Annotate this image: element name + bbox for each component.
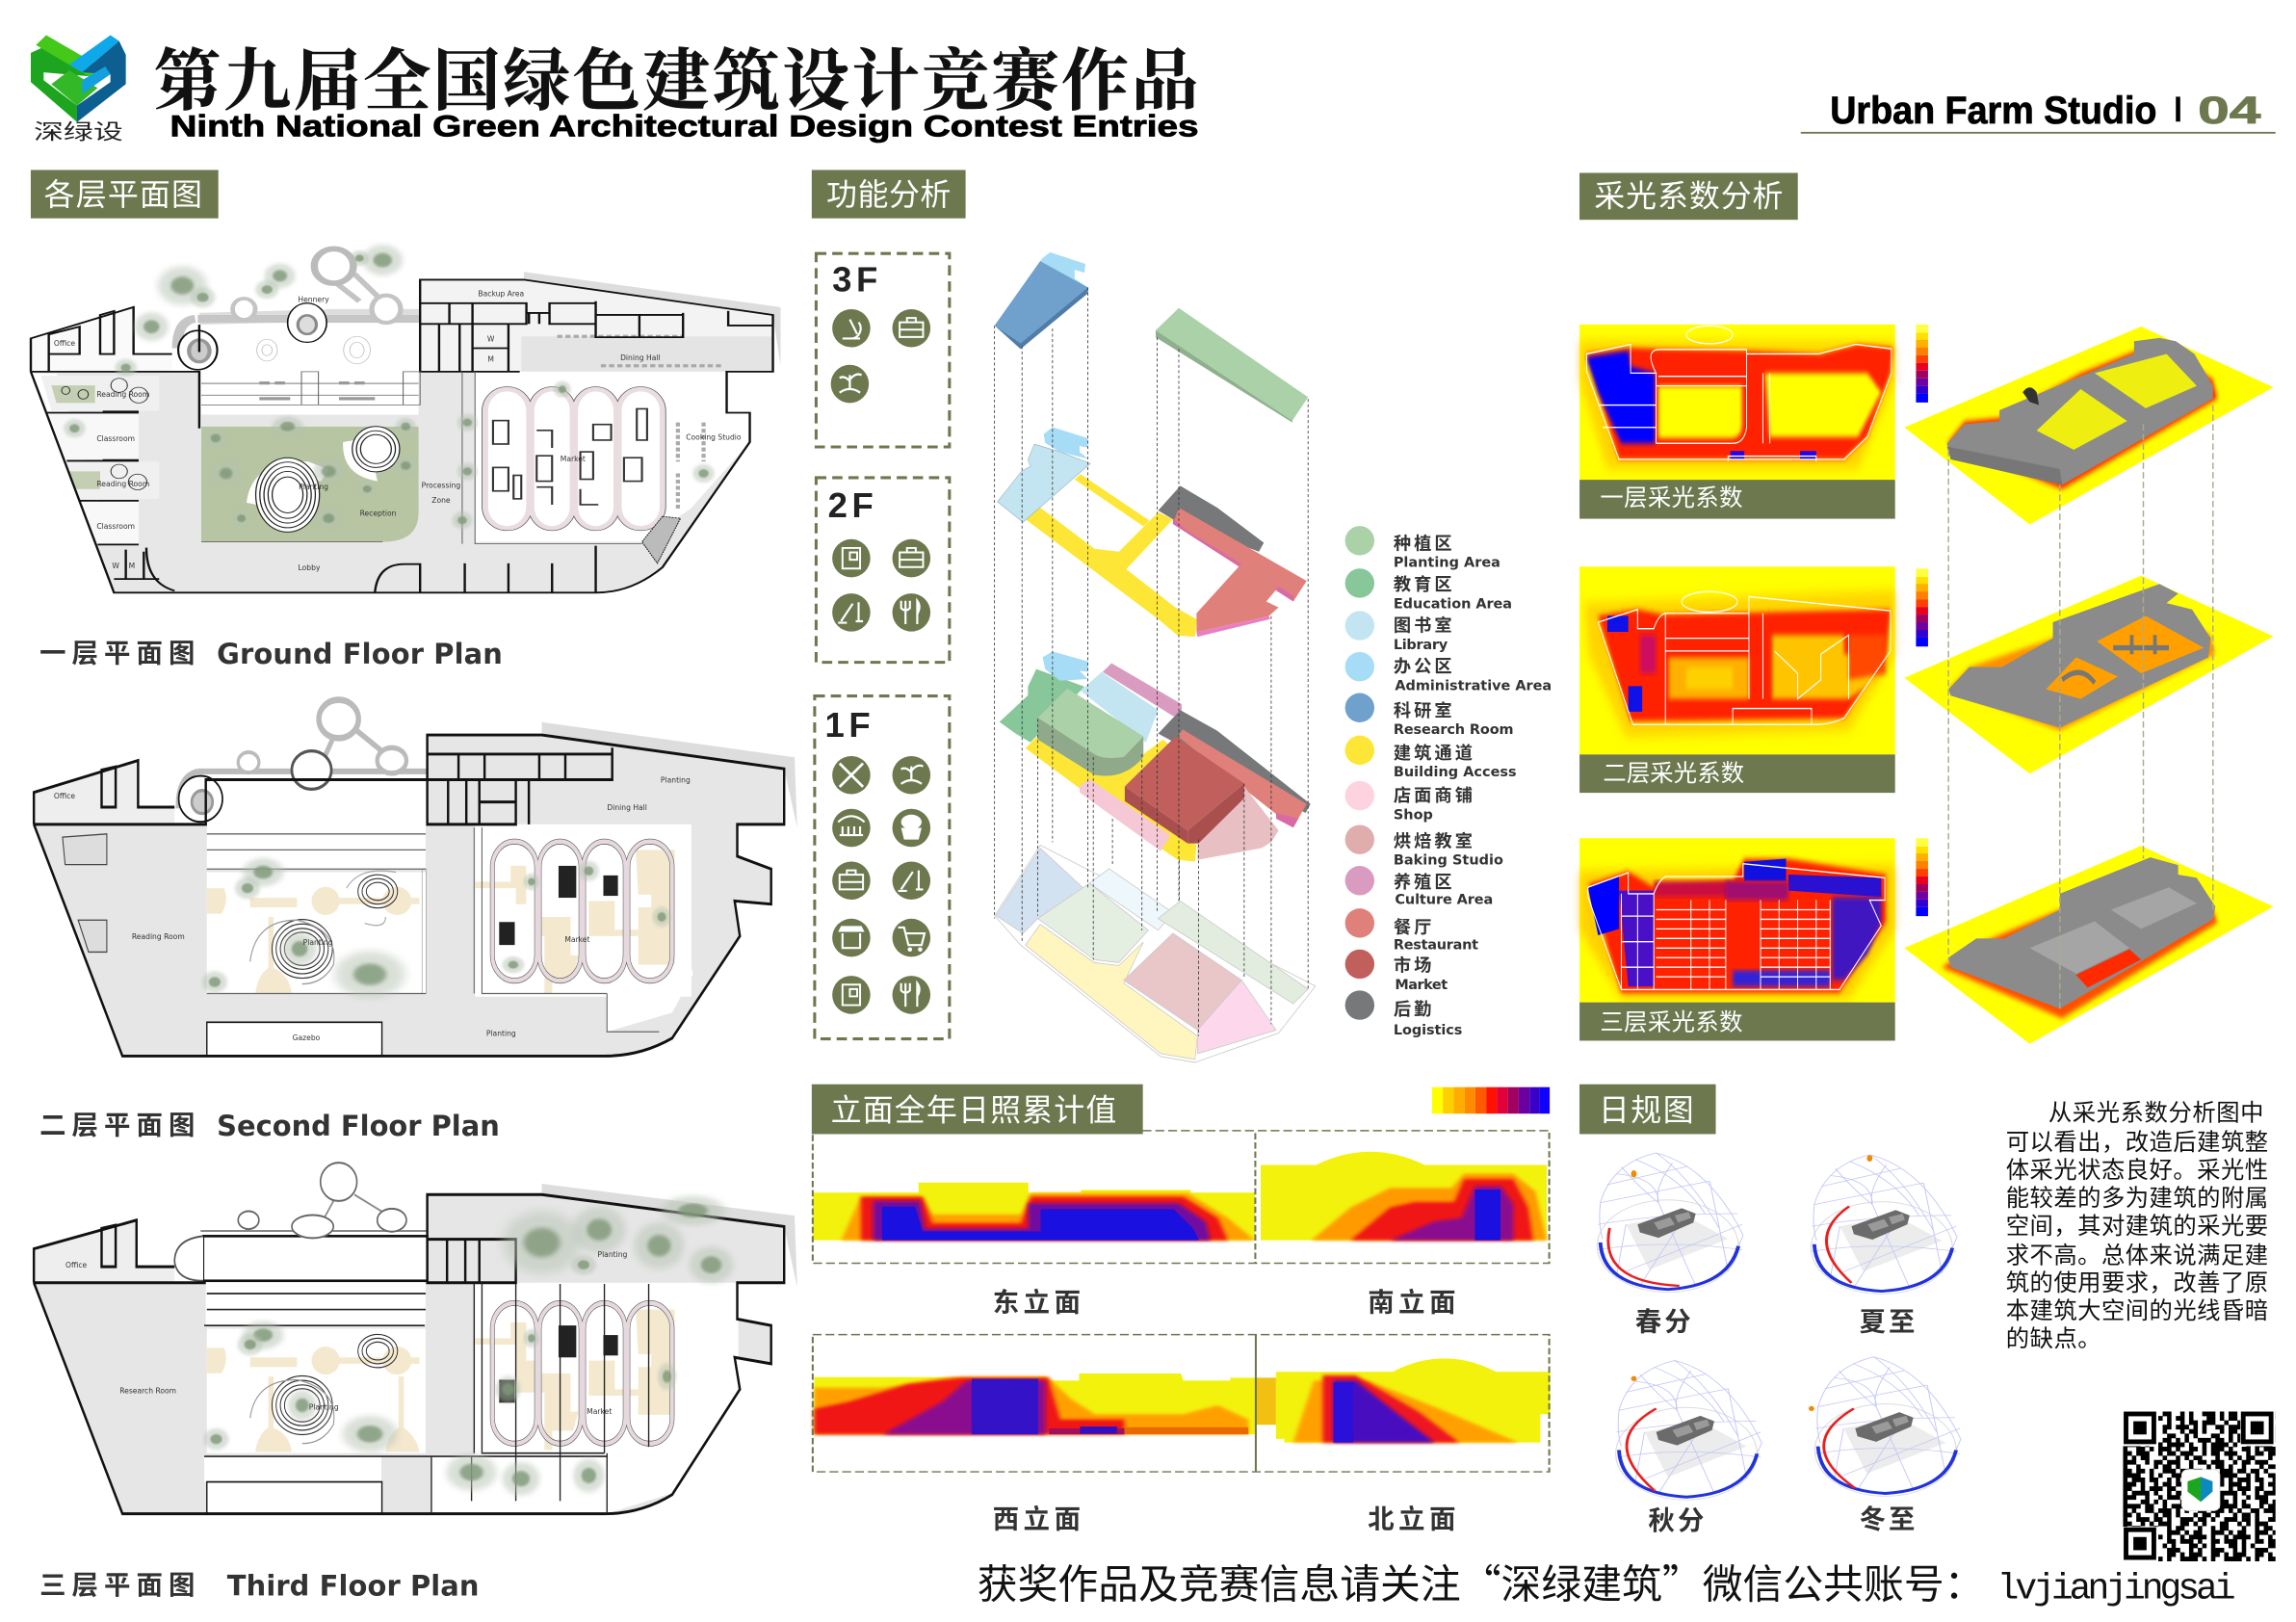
- legend: function colours: 图书室: [1394, 613, 1455, 638]
- icon: tools: [832, 756, 871, 795]
- second floor plan: Gazebo: [293, 1033, 321, 1042]
- autumn equinox dome: [1616, 1361, 1761, 1500]
- ground floor plan: Hennery: [298, 295, 329, 303]
- third floor plan: Research Room: [119, 1387, 176, 1396]
- spring equinox dome: [1597, 1153, 1743, 1293]
- ground floor plan: Office: [54, 339, 75, 348]
- third floor plan: Planting: [597, 1250, 628, 1259]
- text block: analysis: 本建筑大空间的光线昏暗: [2006, 1293, 2268, 1326]
- icon: office case: [832, 861, 871, 900]
- text block: analysis: [2006, 1095, 2268, 1354]
- legend: function colours: 养殖区: [1394, 869, 1455, 894]
- icon: planting: [831, 365, 869, 403]
- ground floor plan: Classroom: [96, 522, 135, 531]
- facade labels: [993, 1281, 1460, 1536]
- daylight captions: 二层采光系数: [1603, 755, 1745, 789]
- chart: facade sunlight maps: [813, 1087, 1551, 1472]
- facade labels: 南立面: [1368, 1281, 1460, 1319]
- icon: book: [832, 976, 871, 1014]
- daylight captions: 三层采光系数: [1600, 1004, 1743, 1037]
- heading: floor plans: 各层平面图: [44, 170, 202, 215]
- text block: analysis: 求不高。总体来说满足建: [2006, 1237, 2268, 1270]
- footer notice: 获奖作品及竞赛信息请关注“深绿建筑”微信公共账号：: [978, 1553, 1985, 1611]
- ground floor caption: [39, 632, 503, 670]
- chart: sun paths: [1597, 1153, 1961, 1500]
- legend: function colours: Shop: [1394, 807, 1433, 823]
- legend: function colours: Planting Area: [1394, 556, 1500, 571]
- daylight captions: [1600, 480, 1745, 1037]
- 3d model: first floor: [1904, 327, 2273, 525]
- icon: cleaning: [832, 593, 871, 632]
- legend: function colours: 办公区: [1394, 653, 1455, 678]
- icon: farm: [832, 809, 871, 847]
- beige walkways: [207, 850, 675, 993]
- third floor plan: Market: [587, 1407, 612, 1416]
- sun path labels: 春分: [1635, 1299, 1694, 1338]
- north elevation: [1255, 1358, 1551, 1443]
- ground floor plan: Classroom: [96, 434, 135, 443]
- studio name: 04: [2198, 90, 2260, 132]
- ground floor plan: Processing: [422, 482, 460, 490]
- icon: cleaning: [893, 861, 930, 900]
- colour scale: [1432, 1087, 1550, 1113]
- daylight map: third floor: [1579, 838, 1895, 1040]
- ground floor plan: Cooking Studio: [686, 432, 742, 441]
- icon: shop: [832, 919, 871, 956]
- legend: function colours: 种植区: [1394, 530, 1455, 555]
- sun path labels: 夏至: [1860, 1299, 1918, 1338]
- text block: analysis: 体采光状态良好。采光性: [2006, 1152, 2268, 1186]
- legend: function colours: 建筑通道: [1394, 740, 1475, 765]
- second floor plan: [34, 700, 797, 1056]
- second floor caption: Second Floor Plan: [217, 1110, 500, 1142]
- west elevation: [814, 1373, 1255, 1434]
- text block: analysis: 能较差的多为建筑的附属: [2006, 1180, 2268, 1214]
- legend: function colours: Restaurant: [1394, 938, 1478, 954]
- ground level: [995, 845, 1316, 1062]
- legend: function colours: Logistics: [1394, 1023, 1462, 1038]
- third floor plan: Office: [65, 1261, 88, 1269]
- third floor caption: 三层平面图: [39, 1563, 195, 1602]
- panel: 2F functions: 2F: [828, 485, 877, 525]
- east elevation: [813, 1183, 1255, 1241]
- third floor: [1040, 252, 1088, 287]
- ground floor plan: Reception: [360, 509, 397, 517]
- text block: analysis: 空间，其对建筑的采光要: [2006, 1208, 2268, 1242]
- legend: function colours: Library: [1394, 638, 1448, 653]
- panel: daylight factor maps: [1579, 325, 2273, 1044]
- third floor plan: Planting: [309, 1402, 339, 1411]
- colour scales: [1916, 325, 1928, 916]
- title chinese: 第九届全国绿色建筑设计竞赛作品: [154, 27, 1198, 124]
- legend: function colours: 餐厅: [1394, 914, 1434, 939]
- ground floor caption: 一层平面图: [39, 632, 195, 670]
- first floor: [1026, 734, 1196, 862]
- sun path labels: 秋分: [1649, 1499, 1707, 1537]
- ground floor plan: Lobby: [299, 563, 321, 572]
- legend: function colours: 烘焙教室: [1394, 827, 1475, 852]
- heading: sun path: [1579, 1085, 1716, 1134]
- facade labels: 西立面: [993, 1498, 1085, 1536]
- second floor plan: Planting: [303, 938, 333, 947]
- ground floor plan: M: [487, 355, 494, 364]
- third floor caption: Third Floor Plan: [227, 1570, 479, 1603]
- facade labels: 北立面: [1368, 1498, 1460, 1536]
- second floor plan: Reading Room: [132, 932, 185, 941]
- dashed projection lines: [1948, 406, 2213, 1008]
- studio name: [1801, 90, 2276, 134]
- ground floor plan: W: [112, 562, 119, 570]
- facade labels: 东立面: [993, 1281, 1085, 1319]
- amphitheatre: [247, 461, 328, 505]
- stadium market: [485, 389, 663, 528]
- heading: facade sunlight: 立面全年日照累计值: [831, 1086, 1116, 1131]
- legend: function colours: Culture Area: [1395, 893, 1493, 908]
- legend: function colours: Administrative Area: [1395, 678, 1552, 693]
- heading: function analysis: 功能分析: [826, 170, 951, 215]
- text block: analysis: 筑的使用要求，改善了原: [2006, 1265, 2268, 1298]
- icon: cupcake: [893, 809, 930, 847]
- second floor plan: Planting: [486, 1030, 516, 1038]
- summer solstice dome: [1811, 1155, 1957, 1295]
- footer notice: lvjianjingsai: [1997, 1569, 2236, 1610]
- legend: function colours: Baking Studio: [1394, 853, 1503, 869]
- ground floor plan: [31, 245, 781, 592]
- second floor plan: Market: [564, 935, 589, 944]
- daylight map: second floor: [1579, 566, 1895, 793]
- icon: cart: [893, 919, 930, 956]
- sun path labels: 冬至: [1860, 1498, 1918, 1536]
- legend: function colours: Building Access: [1394, 765, 1517, 780]
- panel: 1F functions: 1F: [825, 705, 874, 745]
- logo: [31, 36, 126, 146]
- ground floor plan: Backup Area: [478, 289, 524, 298]
- 3d model: third floor: [1904, 846, 2273, 1044]
- ground floor plan: Market: [561, 455, 586, 463]
- logo: 深绿设: [34, 116, 123, 146]
- legend: function colours: [1345, 526, 1552, 1038]
- 3d model: second floor: [1904, 576, 2273, 773]
- second floor plan: Office: [54, 792, 75, 800]
- second floor caption: 二层平面图: [39, 1103, 195, 1141]
- ground floor plan: W: [487, 334, 495, 343]
- legend: function colours: 店面商铺: [1394, 782, 1475, 807]
- heading: daylight factor: 采光系数分析: [1594, 171, 1784, 216]
- studio name: Urban Farm Studio: [1830, 90, 2156, 132]
- icon: cutlery: [893, 593, 930, 632]
- winter solstice dome: [1809, 1357, 1961, 1496]
- walls: [31, 279, 773, 592]
- ground floor caption: Ground Floor Plan: [217, 638, 503, 670]
- legend: function colours: 市场: [1394, 953, 1434, 978]
- legend: function colours: Market: [1395, 978, 1448, 993]
- daylight map: first floor: [1579, 325, 1895, 519]
- panel: 1F functions: [815, 696, 950, 1039]
- heading: sun path: 日规图: [1599, 1086, 1694, 1131]
- second floor: [1026, 508, 1196, 637]
- third floor caption: [39, 1563, 479, 1603]
- second floor plan: Dining Hall: [607, 803, 647, 812]
- second floor caption: [39, 1103, 500, 1142]
- ground floor plan: Planting: [299, 483, 328, 491]
- title english: Ninth National Green Architectural Design Contest Entries: [170, 109, 1198, 143]
- panel: 3F functions: 3F: [832, 260, 882, 300]
- icon: office case: [893, 539, 930, 577]
- icon: planting: [893, 756, 930, 795]
- dashed projection lines: [995, 287, 1308, 1036]
- ground floor plan: Reading Room: [96, 390, 149, 399]
- legend: function colours: 科研室: [1394, 697, 1455, 722]
- ground floor plan: Reading Room: [96, 480, 149, 488]
- second floor plan: Planting: [661, 775, 691, 784]
- chart: exploded axonometric: [995, 252, 1316, 1062]
- ground floor plan: M: [129, 562, 135, 570]
- dashed frames: [813, 1131, 1550, 1472]
- qr code: [2123, 1411, 2276, 1562]
- daylight captions: 一层采光系数: [1600, 480, 1743, 513]
- text block: analysis: 可以看出，改造后建筑整: [2006, 1124, 2268, 1158]
- south elevation: [1261, 1152, 1547, 1241]
- ground floor plan: Dining Hall: [620, 353, 661, 362]
- icon: cutlery: [893, 976, 930, 1014]
- legend: function colours: 后勤: [1394, 996, 1434, 1021]
- legend: function colours: Research Room: [1394, 722, 1514, 738]
- legend: function colours: Education Area: [1394, 596, 1512, 612]
- corridor: [177, 319, 420, 348]
- panel: 2F functions: [816, 478, 950, 663]
- icon: book: [832, 539, 871, 577]
- sun path labels: [1635, 1299, 1918, 1537]
- legend: function colours: 教育区: [1394, 571, 1455, 596]
- ground floor plan: Zone: [431, 496, 451, 505]
- third floor plan: [34, 1163, 797, 1514]
- icon: office case: [893, 309, 930, 348]
- text block: analysis: 的缺点。: [2006, 1321, 2101, 1354]
- text block: analysis: 从采光系数分析图中: [2048, 1095, 2264, 1129]
- panel: 3F functions: [816, 253, 950, 447]
- icon: research: [832, 309, 871, 348]
